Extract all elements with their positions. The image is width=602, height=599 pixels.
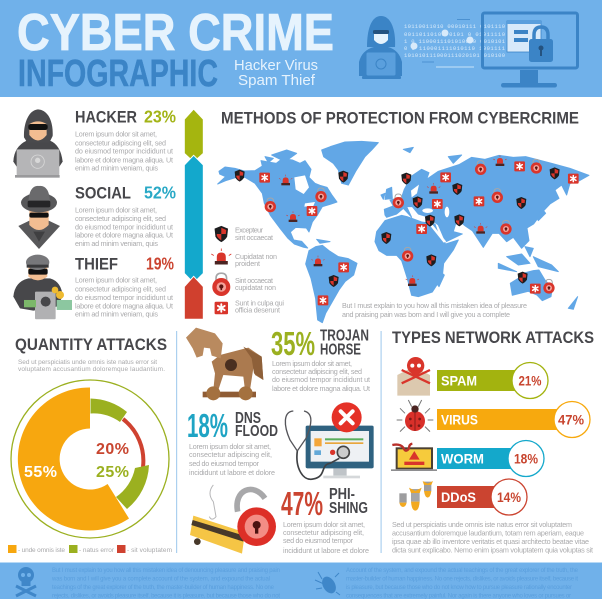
labels: donut percentages: 55% xyxy=(24,464,57,481)
text: hacker: enim ad minim veniam, quis xyxy=(75,163,158,172)
map legend xyxy=(211,226,284,315)
heading: hacker 23%: HACKER xyxy=(75,108,137,127)
legend text: star xyxy=(235,299,284,315)
icon: ddos bombs xyxy=(399,481,433,511)
legend text: lock: Sint occaecat xyxy=(235,276,273,285)
legend text: alarm: Cupidatat non xyxy=(235,252,277,261)
map caption: But I must explain to you how all this mistaken idea of pleasure xyxy=(342,301,527,310)
stat: 35% trojan horse: 35% xyxy=(271,325,315,362)
text: thief: enim ad minim veniam, quis xyxy=(75,310,158,319)
markers: shields xyxy=(235,167,560,287)
legend text: alarm xyxy=(235,252,277,268)
text: social: labore et dolore magna aliqua. Ut xyxy=(75,231,173,240)
text: social: Lorem ipsum dolor sit amet, xyxy=(75,205,157,214)
bar: spam 21%: 21% xyxy=(518,372,542,388)
text: social: consectetur adipiscing elit, sed xyxy=(75,214,166,223)
text: thief xyxy=(75,276,173,319)
stat: 47% phishing: SHING xyxy=(329,500,368,517)
icon: hacker xyxy=(13,109,63,178)
map caption xyxy=(342,301,527,319)
text: phishing xyxy=(283,520,369,555)
text: phishing: incididunt ut labore et dolore xyxy=(283,546,369,555)
donut chart xyxy=(11,380,169,538)
markers: alarms xyxy=(279,155,507,286)
heading: thief 19% xyxy=(75,253,174,273)
labels: donut percentages: 25% xyxy=(96,464,129,481)
stat: 18% dns flood: FLOOD xyxy=(235,423,278,440)
text: hacker: Lorem ipsum dolor sit amet, xyxy=(75,130,157,139)
icon: phishing card and lock xyxy=(190,485,276,554)
bar: ddos 14%: DDoS xyxy=(441,489,476,505)
icon: social engineer xyxy=(18,186,60,249)
panel: types network attacks xyxy=(391,328,594,554)
binary data stream: 0 0 110001111010110 1001111 xyxy=(404,45,506,52)
icon: virus bug xyxy=(397,400,433,432)
bar: virus 47%: 47% xyxy=(558,412,585,428)
labels: donut percentages: 20% xyxy=(96,441,129,458)
text: thief: consectetur adipiscing elit, sed xyxy=(75,284,166,293)
heading: thief 19%: THIEF xyxy=(75,254,118,273)
stat: 47% phishing: 47% xyxy=(281,485,323,522)
bar: ddos 14%: 14% xyxy=(497,489,521,505)
stat: 18% dns flood: DNS xyxy=(235,410,261,427)
text: dns: Lorem ipsum dolor sit amet, xyxy=(189,442,271,451)
text: footer left: teachings of the great explorer of the truth, the master-builder of human happiness. No one xyxy=(52,585,275,591)
icon: spam envelope xyxy=(397,357,430,396)
stat: 47% phishing: PHI- xyxy=(329,486,355,503)
text: footer right xyxy=(346,568,579,599)
legend text: shield: sint occaecat xyxy=(235,233,273,242)
heading: quantity attacks: QUANTITY ATTACKS xyxy=(15,336,167,354)
text: trojan: labore et dolore magna aliqua. Ut xyxy=(272,384,370,393)
text: social xyxy=(75,205,173,248)
legend text: star: officia deserunt xyxy=(235,306,280,315)
icon: alarm legend xyxy=(211,248,231,264)
title: cyber crime: CYBER CRIME xyxy=(17,4,334,62)
text: dns: consectetur adipiscing elit, xyxy=(189,450,272,459)
panel: attacker profiles xyxy=(13,107,176,319)
icon: monitor with padlock xyxy=(482,13,578,88)
tagline xyxy=(234,57,318,89)
bar: virus 47%: VIRUS xyxy=(441,412,478,428)
text: quantity intro xyxy=(18,359,165,373)
map caption: and praising pain was born and I will give you a complete xyxy=(342,310,510,319)
legend text: star: Sunt in culpa qui xyxy=(235,299,284,308)
text: dns xyxy=(189,442,275,477)
text: footer left xyxy=(51,568,280,599)
text: quantity intro: Sed ut perspiciatis unde omnis iste natus error sit xyxy=(18,359,157,366)
text: network attacks: accusantium doloremque laudantium, totam rem aperiam, eaque xyxy=(392,528,584,538)
text: network attacks: dicta sunt explicabo. Nemo enim ipsam voluptatem quia voluptas sit xyxy=(392,546,593,554)
text: thief: Lorem ipsum dolor sit amet, xyxy=(75,276,157,285)
world map xyxy=(218,141,589,323)
seas xyxy=(294,175,469,243)
binary data stream: 00110110100 0101 0 01011110 xyxy=(404,31,505,38)
footer band xyxy=(0,562,602,599)
header banner xyxy=(0,0,602,97)
donut legend xyxy=(8,545,172,554)
legend text: lock xyxy=(235,276,276,292)
text: network attacks: ipsa quae ab illo inventore veritatis et quasi architecto beatae vitae xyxy=(392,537,589,546)
text: trojan: Lorem ipsum dolor sit amet, xyxy=(272,359,352,368)
stat: 35% trojan horse: HORSE xyxy=(320,342,361,358)
panel: quantity attacks xyxy=(8,336,172,554)
donut legend: - unde omnis iste xyxy=(18,547,65,554)
binary data stream: 1 0 11000111010100 0 0010101 xyxy=(404,38,506,45)
icon: star legend xyxy=(215,302,228,314)
text: hacker: labore et dolore magna aliqua. Ut xyxy=(75,155,173,164)
text: thief: do eiusmod tempor incididunt ut xyxy=(75,293,173,302)
text: footer right: master-builder of human happiness. No one rejects, dislikes, or avoids pleasure itself, because it xyxy=(346,576,578,582)
text: dns: sed do eiusmod tempor xyxy=(189,459,260,468)
bar: spam 21% xyxy=(437,362,548,398)
icon: footer bug xyxy=(315,572,340,596)
text: footer left: was born and I will give you a complete account of the system, and expound the actual xyxy=(51,576,270,582)
arrows xyxy=(422,20,474,67)
bar: ddos 14% xyxy=(437,479,527,515)
labels: donut percentages xyxy=(24,441,129,481)
stat: 18% dns flood: 18% xyxy=(187,407,228,444)
panel: trojan, dns, phishing xyxy=(186,325,374,555)
tagline: Hacker Virus xyxy=(234,57,318,74)
text: footer right: is pleasure, but because those who do not know how to pursue pleasure rationally encounter xyxy=(346,585,572,591)
stat: 35% trojan horse xyxy=(271,325,369,362)
heading: hacker 23% xyxy=(75,107,176,127)
subtitle: infographic: INFOGRAPHIC xyxy=(18,53,218,95)
text: thief: labore et dolore magna aliqua. Ut xyxy=(75,301,173,310)
text: footer left: But I must explain to you how all this mistaken idea of denouncing pleasure and praising pain xyxy=(52,568,280,574)
bar: spam 21%: SPAM xyxy=(441,372,477,388)
text: phishing: consectetur adipiscing elit, xyxy=(283,528,364,537)
legend text: shield xyxy=(235,226,273,242)
legend text: lock: cupidatat non xyxy=(235,283,276,292)
icon: worm laptop xyxy=(391,444,437,471)
icon: stethoscope on monitor xyxy=(285,402,374,479)
text: network attacks: Sed ut perspiciatis unde omnis iste natus error sit voluptatem xyxy=(392,520,572,529)
markers: stars xyxy=(259,161,579,305)
icon: header hacker xyxy=(359,16,402,79)
text: dns: incididunt ut labore et dolore xyxy=(189,468,275,477)
heading: social 52% xyxy=(75,183,176,203)
tagline: Spam Thief xyxy=(238,72,316,89)
stat: 35% trojan horse: TROJAN xyxy=(320,328,369,345)
text: hacker xyxy=(75,130,173,172)
donut legend: - sit voluptatem xyxy=(127,547,172,554)
text: phishing: sed do eiusmod tempor xyxy=(283,536,354,545)
icon: footer skull xyxy=(16,567,36,596)
legend text: alarm: proident xyxy=(235,259,260,268)
icon: lock legend xyxy=(212,273,230,296)
binary data stream: 101010111000111020101 010100 xyxy=(404,52,505,59)
bar: virus 47% xyxy=(437,402,590,438)
icon: thief xyxy=(13,255,72,319)
text: footer right: Account of the system, and expound the actual teachings of the great explorer of the truth, the xyxy=(346,568,579,574)
text: network attacks xyxy=(392,520,593,554)
binary data stream: 10110011010 00010111 0101110 xyxy=(404,23,505,30)
icon: trojan horse xyxy=(186,328,263,400)
text: trojan xyxy=(272,359,370,393)
text: hacker: consectetur adipiscing elit, sed xyxy=(75,138,166,147)
text: social: enim ad minim veniam, quis xyxy=(75,239,158,248)
icon: shield legend xyxy=(215,226,228,242)
text: phishing: Lorem ipsum dolor sit amet, xyxy=(283,520,365,529)
bar: worm 18%: WORM xyxy=(441,450,484,466)
heading: thief 19%: 19% xyxy=(146,253,174,273)
bar: worm 18%: 18% xyxy=(514,450,538,466)
markers: locks xyxy=(265,159,555,294)
text: quantity intro: voluptatem accusantium doloremque laudantium. xyxy=(18,366,165,373)
donut legend: - natus error xyxy=(79,547,115,554)
heading: hacker 23%: 23% xyxy=(144,107,176,127)
heading: social 52%: 52% xyxy=(144,183,176,203)
vertical arrow gauge xyxy=(184,109,203,319)
heading: social 52%: SOCIAL xyxy=(75,184,131,203)
text: trojan: do eiusmod tempor incididunt ut xyxy=(272,375,370,384)
text: trojan: consectetur adipiscing elit, sed xyxy=(272,367,362,376)
bar: worm 18% xyxy=(437,440,544,476)
legend text: shield: Excepteur xyxy=(235,226,264,235)
binary data stream xyxy=(404,23,506,59)
text: hacker: do eiusmod tempor incididunt ut xyxy=(75,146,173,155)
text: social: do eiusmod tempor incididunt ut xyxy=(75,222,173,231)
